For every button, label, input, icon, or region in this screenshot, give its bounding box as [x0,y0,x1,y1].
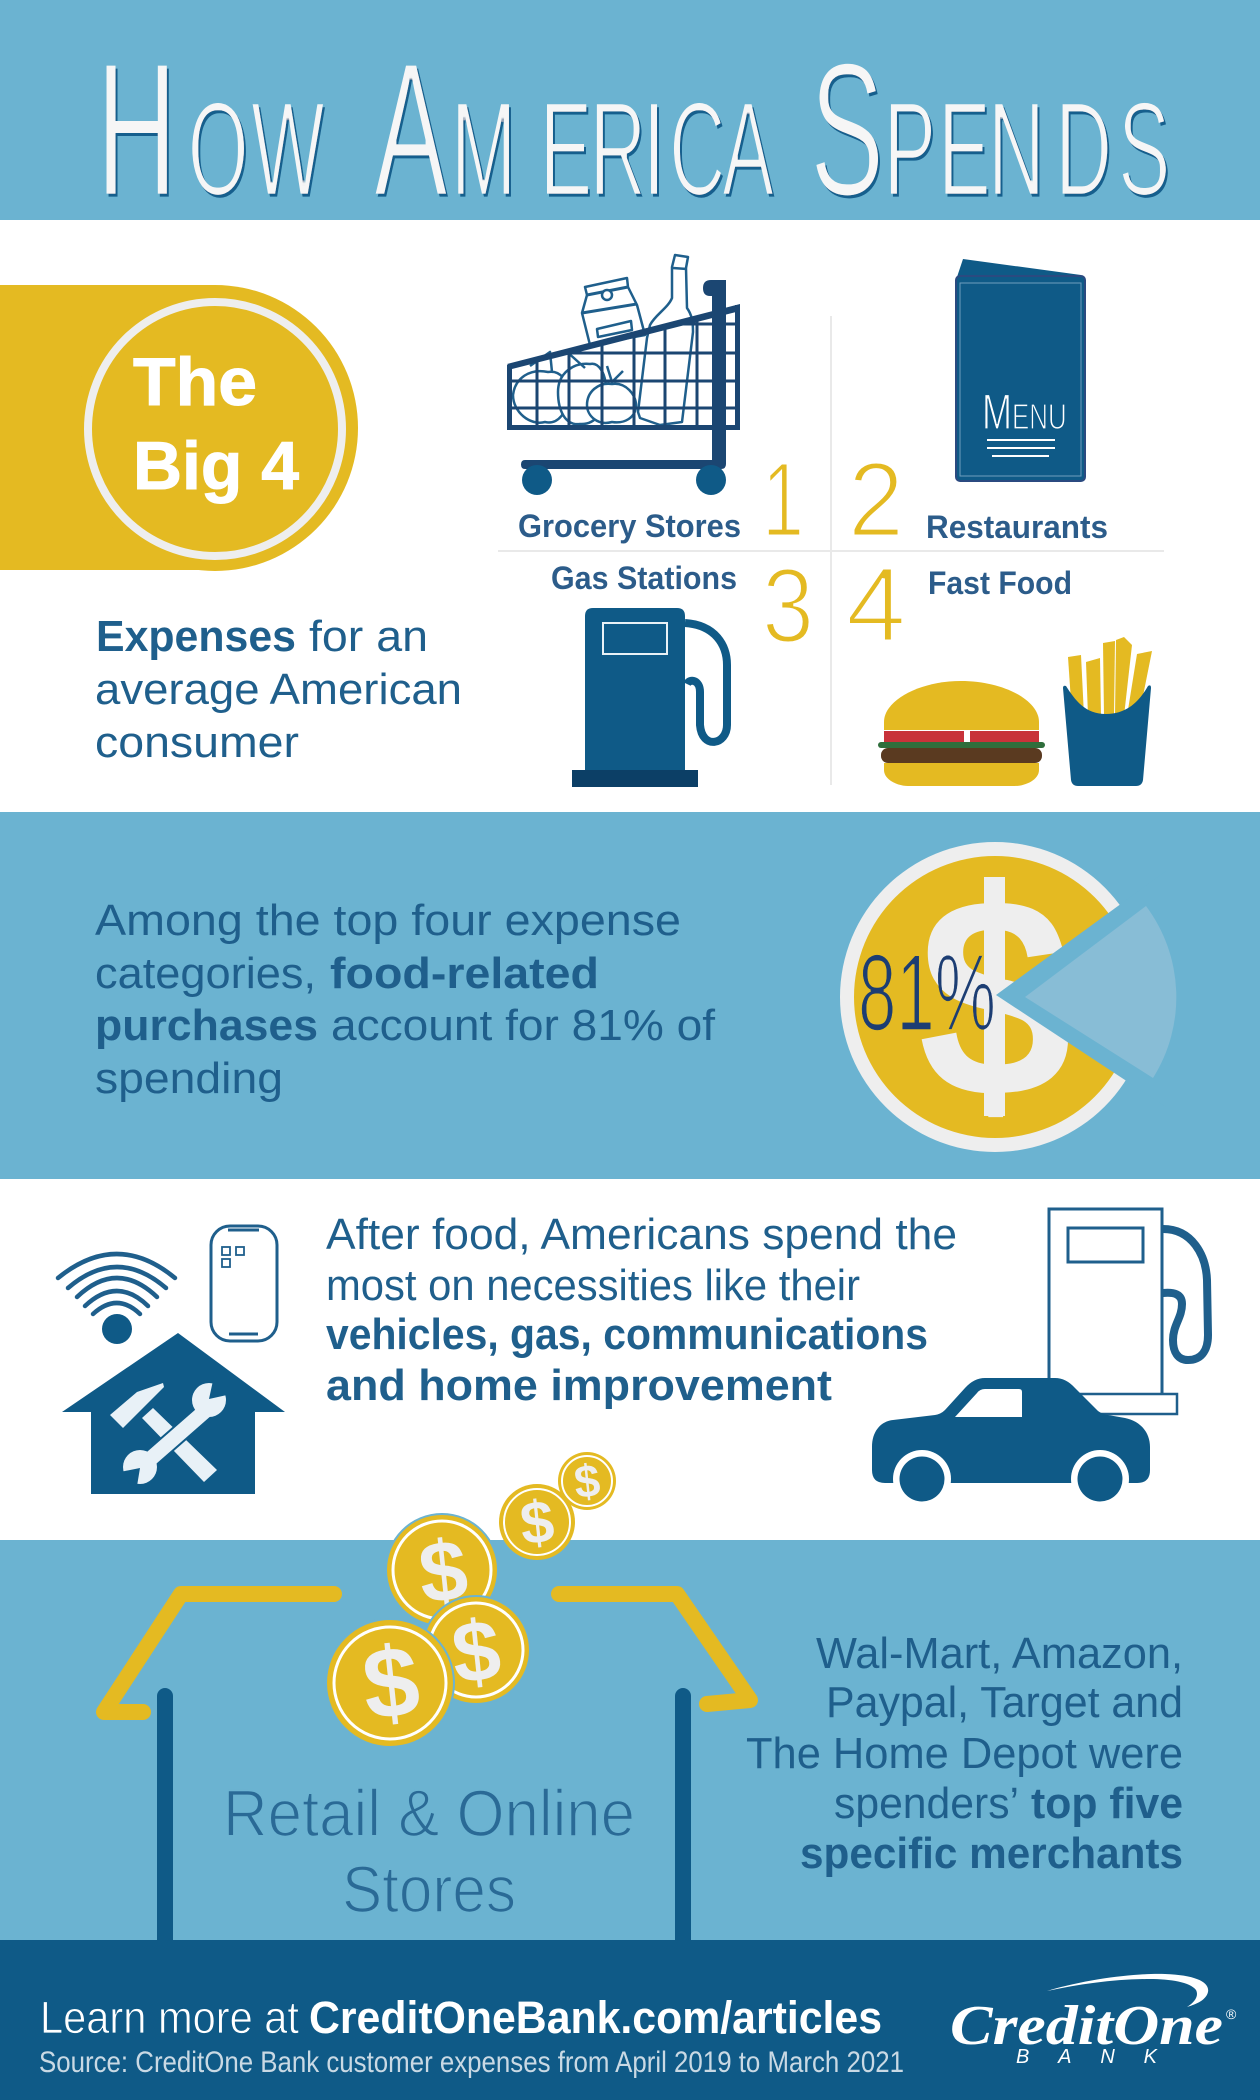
chart: coin pie: $ [918,839,1072,1157]
logo: Credit One Bank: ® [1226,2006,1237,2022]
panel: food-related purchases [0,812,1260,1179]
icon: open box [104,1594,750,1945]
chart: coin pie [840,839,1176,1157]
text: expenses: consumer [95,718,299,767]
icon: outlined gas pump [1049,1209,1208,1414]
rank numbers [762,441,906,665]
category labels: Grocery Stores [518,508,741,544]
title: MERICA [451,75,822,224]
icon: falling coins: $ [572,1454,602,1508]
text: top merchants: Wal-Mart, Amazon, [816,1629,1183,1678]
icon: gas pump [572,608,727,787]
icon: falling coins [325,1452,616,1748]
title: S [810,23,884,235]
text: expenses: average American [95,665,462,714]
panel: necessities [58,1209,1208,1508]
category labels: Restaurants [926,509,1108,545]
text: top merchants: The Home Depot were [746,1729,1183,1778]
text: retail and online stores: Stores [342,1852,516,1926]
title: OW [188,75,370,224]
logo: Credit One Bank [950,1974,1237,2068]
text: after food [326,1210,957,1410]
category labels: Gas Stations [551,560,737,596]
title: H [97,23,176,235]
icon: shopping cart [507,255,740,495]
text: after food: After food, Americans spend the [326,1210,957,1259]
text: top merchants: Paypal, Target and [826,1678,1183,1727]
category labels [518,508,1108,601]
title [97,23,1170,235]
logo: Credit One Bank: BANK [1016,2046,1159,2068]
text: top merchants [746,1629,1183,1878]
text: top merchants: top five [1031,1779,1183,1828]
text: food-related: Among the top four expense [95,896,681,945]
badge: The Big 4: Big 4 [133,428,299,504]
text: after food: vehicles, gas, communications [326,1310,928,1359]
text: retail and online stores [223,1776,635,1926]
text: food-related [95,896,716,1103]
icon: falling coins: $ [517,1487,557,1558]
panel: the big 4 [0,255,1164,787]
chart: coin pie: 81% [858,932,996,1054]
rank numbers: 1 [762,441,804,559]
text: food-related: categories, [95,949,316,998]
icon: house with tools [62,1333,285,1494]
text: top merchants: spenders’ [834,1779,1019,1828]
text: expenses [95,612,462,767]
text: learn more [40,1992,882,2043]
icon: menu: MENU [982,385,1067,440]
text: learn more: Learn more at [40,1992,299,2043]
rank numbers: 4 [846,546,906,664]
grid dividers [498,316,1164,785]
text: source: Source: CreditOne Bank customer expenses from April 2019 to March 2021 [39,2046,904,2079]
icon: wifi [58,1254,175,1344]
icon: car [872,1378,1150,1508]
text: retail and online stores: Retail & Online [223,1776,635,1850]
icon: burger and fries [878,637,1152,786]
title: PENDS [884,75,1170,224]
text: after food: and home improvement [326,1361,832,1410]
icon: phone [211,1226,277,1341]
rank numbers: 2 [848,441,904,559]
panel: retail and online stores [0,1452,1260,1945]
rank numbers: 3 [762,547,814,665]
logo: Credit One Bank: CreditOne [950,1995,1223,2057]
badge: The Big 4 [0,285,358,571]
icon: menu [955,259,1085,481]
title: A [374,23,448,235]
category labels: Fast Food [928,565,1072,601]
text: food-related: purchases [95,1001,318,1050]
panel: title band [0,0,1260,235]
badge: The Big 4: The [133,344,257,420]
text: food-related: food-related [330,949,599,998]
icon: falling coins: $ [414,1522,472,1622]
text: top merchants: specific merchants [800,1829,1183,1878]
panel: footer [0,1940,1260,2100]
text: expenses: for an [309,612,428,661]
text: food-related: account for 81% of [331,1001,716,1050]
text: expenses: Expenses [96,612,296,661]
text: food-related: spending [95,1054,283,1103]
text: after food: most on necessities like their [326,1261,860,1310]
icon: falling coins: $ [447,1602,505,1702]
text: learn more: CreditOneBank.com/articles [309,1992,882,2043]
icon: falling coins: $ [357,1624,425,1742]
